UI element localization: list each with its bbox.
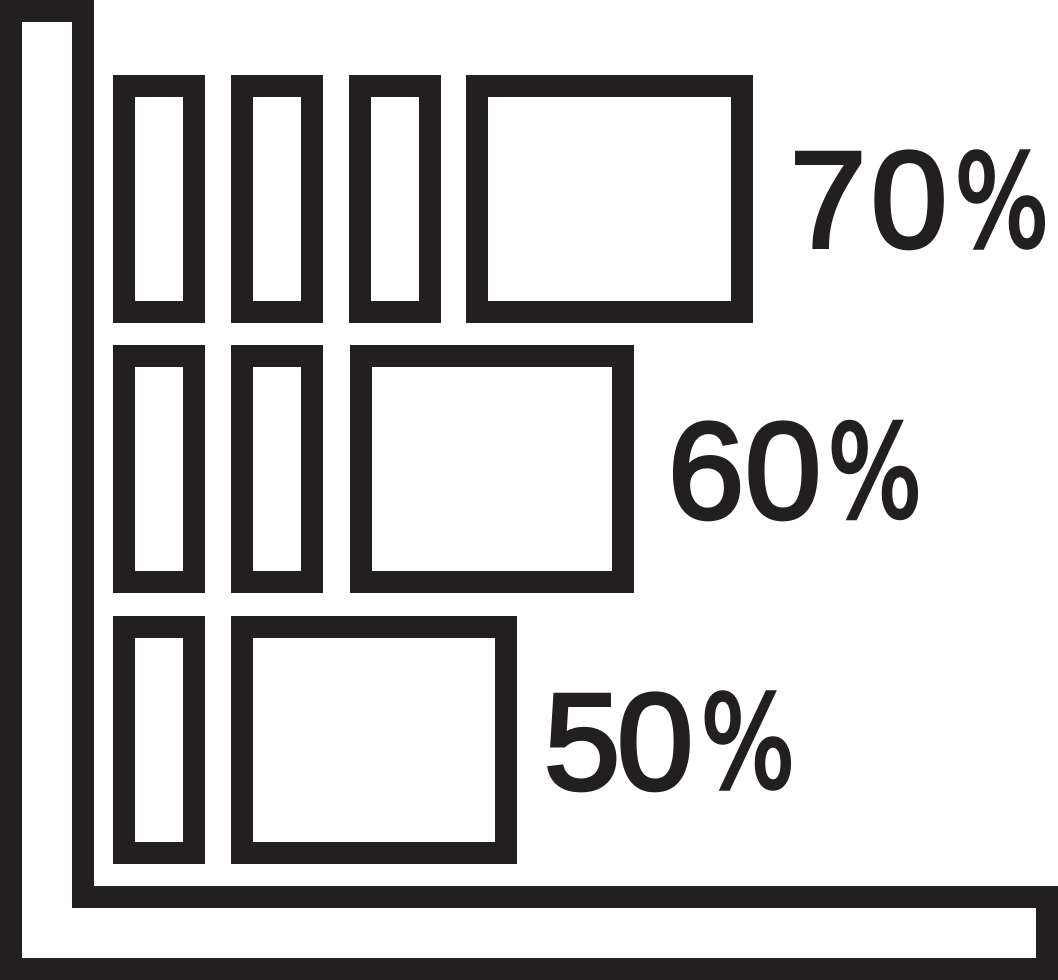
bar row: 60% (124, 356, 623, 582)
label: 70% (790, 124, 1049, 277)
label: 70%: % (954, 128, 1049, 277)
label: 60%: % (827, 398, 922, 548)
label: 60%: 60 (668, 395, 821, 548)
label: 60% (668, 395, 922, 548)
label: 50%: 50 (544, 666, 693, 819)
bar row: 70% (124, 86, 742, 312)
bar row: 50% (124, 627, 506, 853)
label: 50% (544, 666, 795, 819)
label: 50%: % (700, 669, 795, 818)
label: 70%: 70 (790, 124, 947, 277)
